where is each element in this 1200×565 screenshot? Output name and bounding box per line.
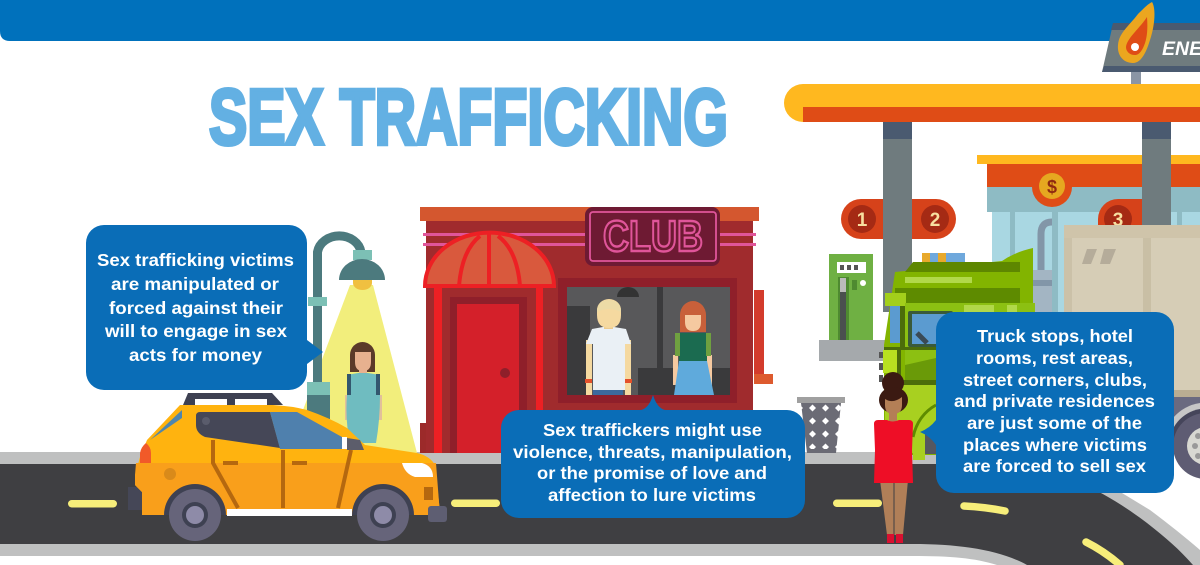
callout: victims: are manipulated or [111,274,279,294]
club window [558,278,737,403]
title: SEX TRAFFICKING [209,72,728,161]
callout: locations: Truck stops, hotel [977,326,1133,346]
road [0,452,1200,565]
callout: locations: rooms, rest areas, [976,348,1133,368]
callout: traffickers: violence, threats, manipulation, [513,442,792,462]
pump number signs: 2 [930,210,940,231]
callout: locations: are just some of the [967,413,1142,433]
club door [434,287,543,453]
energy price sign [1102,2,1200,85]
callout: traffickers [501,395,805,518]
trash can [797,397,845,453]
gas station building: $ [1047,177,1057,197]
neon club sign [585,207,720,266]
fuel pump [819,254,888,361]
pump number signs: 3 [1113,210,1123,231]
street lamp [300,236,417,453]
figure: man in window [585,299,632,395]
icon: flame logo [1118,2,1154,63]
car wheels [164,484,414,541]
callout: locations [920,312,1174,493]
callout: victims [86,225,323,390]
callout: victims: Sex trafficking victims [97,250,294,270]
pump number signs [841,199,1142,239]
callout: victims: will to engage in sex [104,321,287,341]
figure: woman under lamp [345,342,382,443]
red awning [425,233,554,286]
green truck cab [879,248,1035,460]
trailer wheel [1173,413,1200,479]
pump number signs: 1 [857,210,868,231]
figure: woman in red dress [874,372,913,543]
gas station building [977,155,1200,322]
top banner [0,0,1200,41]
figure: woman in window [673,301,714,395]
callout: locations: are forced to sell sex [963,456,1146,476]
truck trailer [1064,225,1200,479]
callout: locations: places where victims [963,435,1147,455]
callout: locations: and private residences [954,391,1155,411]
neon club sign: CLUB [603,212,703,261]
callout: traffickers: Sex traffickers might use [543,420,762,440]
callout: locations: street corners, clubs, [963,370,1147,390]
yellow car [128,393,447,541]
fuel canopy [784,84,1200,312]
callout: traffickers: or the promise of love and [537,463,767,483]
light beam [300,285,417,453]
club building [420,207,773,453]
callout: victims: acts for money [129,345,262,365]
car windows [150,410,364,450]
callout: victims: forced against their [109,298,283,318]
callout: traffickers: affection to lure victims [548,485,756,505]
